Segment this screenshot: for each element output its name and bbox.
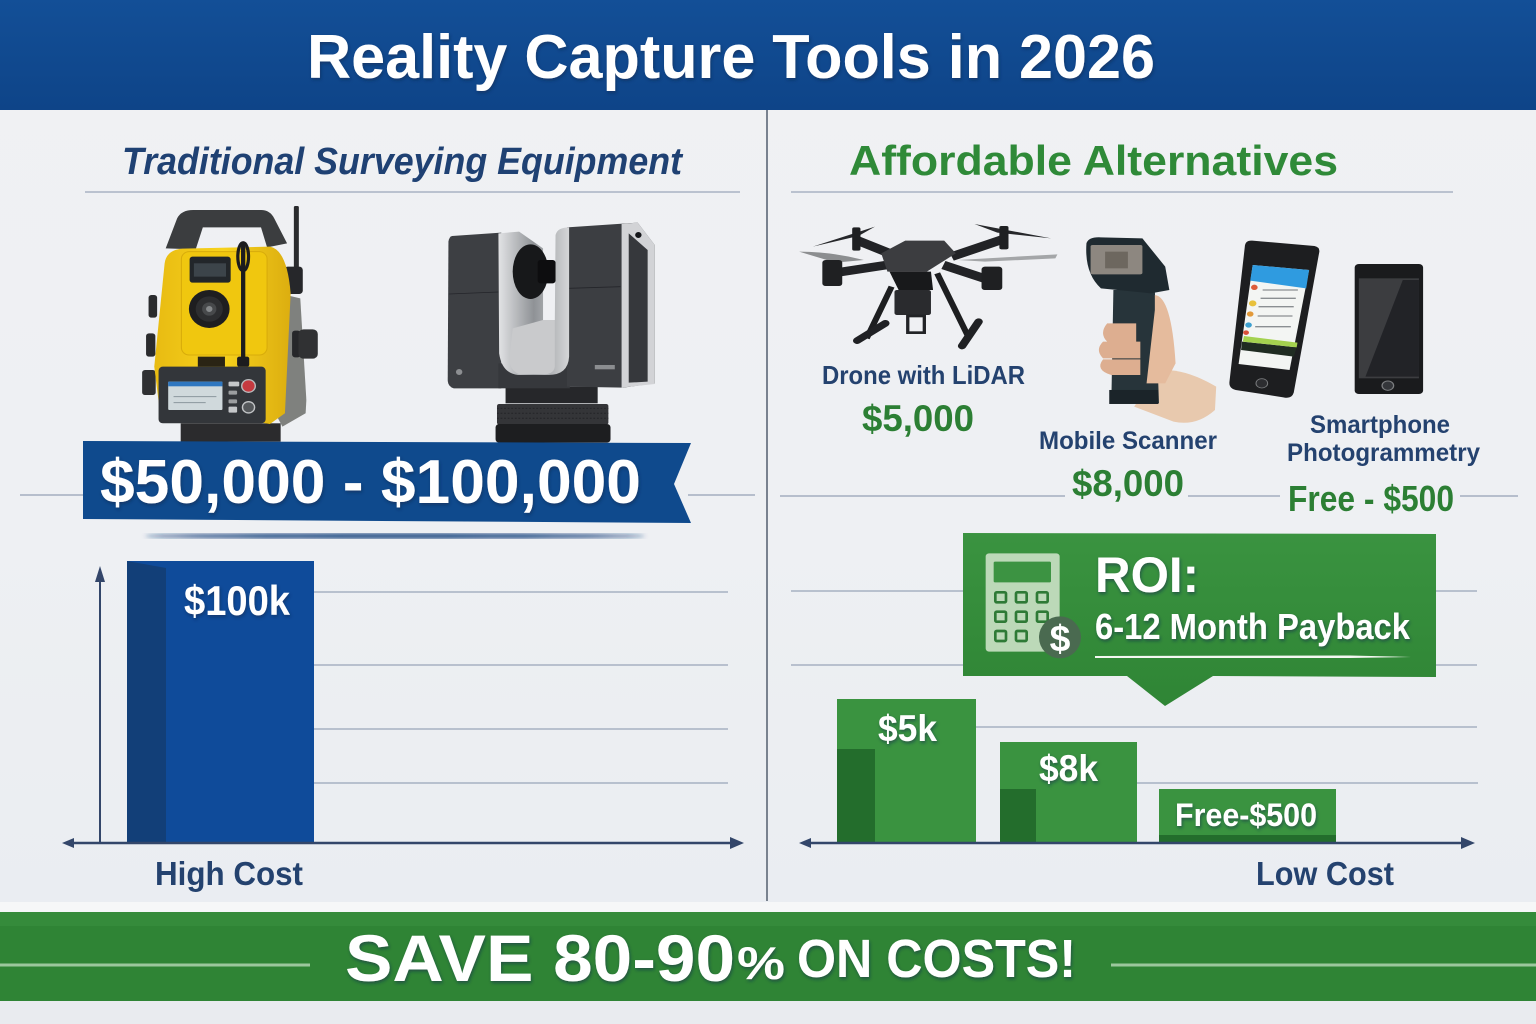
banner: price range: $50,000 - $100,000 bbox=[100, 448, 641, 517]
callout: ROI bbox=[963, 533, 1436, 706]
callout: savings: ON COSTS! bbox=[797, 929, 1076, 989]
label: smartphone photogrammetry: Smartphone bbox=[1310, 411, 1450, 439]
heading: traditional: Traditional Surveying Equipment bbox=[122, 141, 683, 183]
bar: free to 500 bbox=[1159, 789, 1336, 842]
callout: savings: % bbox=[737, 937, 785, 989]
price: smartphone: Free - $500 bbox=[1288, 478, 1454, 519]
label: low cost: Low Cost bbox=[1256, 855, 1394, 892]
icon: total station bbox=[142, 206, 318, 442]
title: Reality Capture Tools in 2026 bbox=[307, 23, 1155, 92]
footer banner bbox=[0, 902, 1536, 1024]
price: mobile scanner: $8,000 bbox=[1072, 463, 1184, 504]
icon: drone bbox=[799, 224, 1057, 346]
icon: calculator: $ bbox=[1050, 617, 1071, 659]
callout: savings: SAVE 80-90 bbox=[345, 921, 735, 995]
header banner bbox=[0, 0, 1536, 110]
bar: 5k bbox=[837, 699, 976, 842]
chart: high cost bar bbox=[62, 561, 744, 892]
label: smartphone photogrammetry: Photogrammetry bbox=[1287, 439, 1480, 467]
icon: smartphones bbox=[1229, 241, 1423, 398]
callout: ROI: ROI: bbox=[1095, 547, 1199, 603]
icon: 3d laser scanner bbox=[448, 223, 655, 443]
price: drone: $5,000 bbox=[862, 398, 974, 439]
panel: affordable alternatives bbox=[780, 137, 1518, 892]
bar: 8k: $8k bbox=[1039, 748, 1098, 789]
label: smartphone photogrammetry bbox=[1287, 411, 1480, 467]
icon: calculator bbox=[986, 553, 1081, 659]
label: drone: Drone with LiDAR bbox=[822, 360, 1025, 390]
bar: 8k bbox=[1000, 742, 1137, 842]
heading: affordable: Affordable Alternatives bbox=[849, 137, 1338, 184]
bar: 5k: $5k bbox=[878, 708, 937, 749]
bar: 100k: $100k bbox=[184, 577, 291, 624]
icon: mobile scanner in hand bbox=[1086, 237, 1216, 423]
label: high cost: High Cost bbox=[155, 855, 303, 892]
label: mobile scanner: Mobile Scanner bbox=[1039, 427, 1217, 455]
callout: ROI: 6-12 Month Payback bbox=[1095, 606, 1411, 647]
callout: savings bbox=[345, 921, 1076, 995]
banner: price range bbox=[83, 441, 691, 538]
bar: 100k bbox=[127, 561, 314, 842]
chart: low cost bars bbox=[799, 699, 1475, 892]
bar: free to 500: Free-$500 bbox=[1175, 797, 1317, 833]
